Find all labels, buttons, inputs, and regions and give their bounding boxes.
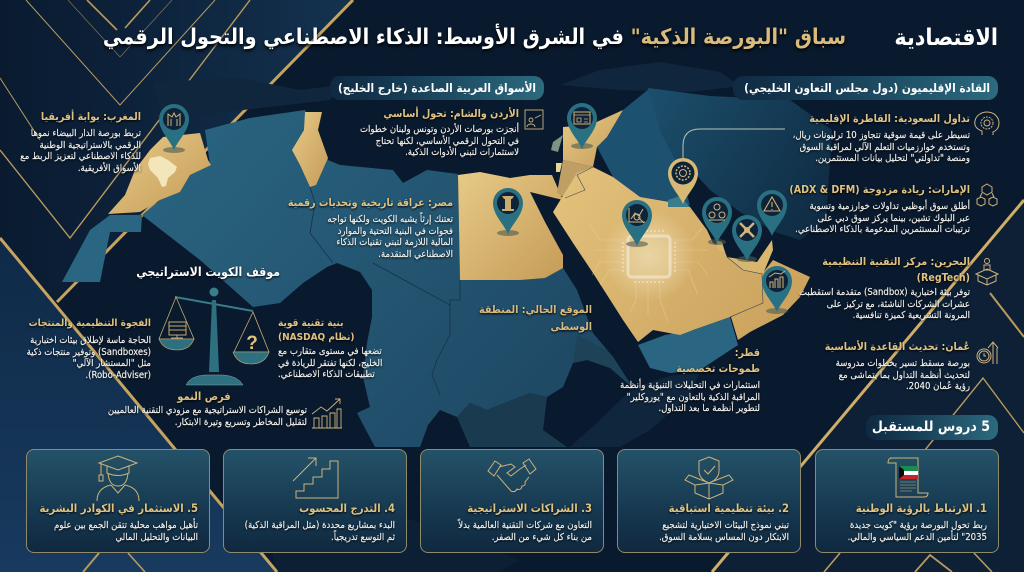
text: Oman: رؤية عُمان 2040. (906, 381, 970, 392)
text: Egypt: مصر: عراقة تاريخية وتحديات رقمية (288, 197, 453, 209)
icon: graduate (96, 456, 140, 501)
text: Morocco: تربط بورصة الدار البيضاء نموها (31, 128, 141, 139)
text: Bahrain: عشرات الشركات الناشئة، مع تركيز على (827, 299, 970, 310)
chip and circuits (603, 210, 695, 302)
text: Saudi: تداول السعودية: القاطرة الإقليمية (809, 113, 970, 125)
card 4: calculated progression: البدء بمشاريع محددة (مثل المراقبة الذكية) (245, 520, 395, 531)
text: strong tech infrastructure: الخليج، لكنها تفتقر للريادة في (278, 358, 382, 369)
text: growth opportunities (108, 390, 307, 429)
text: Saudi (793, 113, 970, 166)
pin: Saudi regional leader (668, 158, 698, 204)
text: Jordan and Levant: لاستثمارات لتبني الأدوات الذكية. (405, 147, 519, 158)
card 2: proactive regulatory: تبني نموذج البيئات الاختبارية لتشجيع (662, 520, 789, 531)
text: current position: الوسطى (551, 320, 592, 333)
card 3: strategic partnerships: التعاون مع شركات التقنية العالمية بدلاً (458, 520, 592, 531)
text: Bahrain: المرونة التشريعية كميزة تنافسية. (853, 310, 970, 321)
icon: stairs (292, 458, 338, 498)
card 3: strategic partnerships: من بناء كل شيء من الصفر. (492, 532, 592, 543)
card 1: national vision: ربط تحول البورصة برؤية "كويت جديدة (850, 520, 987, 531)
africa silhouette (148, 156, 177, 187)
icon: clock arrow (976, 341, 998, 364)
text: strong tech infrastructure: تطبيقات الذكاء الاصطناعي. (278, 369, 375, 380)
card 2: proactive regulatory (617, 449, 801, 553)
pin: Qatar (732, 215, 762, 261)
map land: dark north (153, 62, 740, 115)
card 2: proactive regulatory: الابتكار دون المساس بسلامة السوق. (659, 532, 789, 543)
text: Bahrain (798, 256, 971, 323)
text: Qatar: المراقبة الذكية بالتعاون مع "يوروكلير" (627, 392, 760, 403)
heading: five lessons: 5 دروس للمستقبل (872, 419, 990, 435)
icon: presenter board (524, 110, 544, 130)
card 5: human capital (26, 449, 210, 553)
text: Saudi: تسيطر على قيمة سوقية تتجاوز 10 ترليونات ريال، (793, 130, 970, 141)
text: Oman: لتحديث أنظمة التداول بما يتماشى مع (839, 370, 970, 381)
icon: brain gear (974, 112, 1000, 135)
text: growth opportunities: لتقليل المخاطر وتسريع وتيرة الابتكار. (175, 417, 307, 428)
text: Qatar: قطر: (735, 347, 760, 359)
heading: emerging Arab markets (330, 76, 544, 100)
text: Egypt: الاصطناعي المتقدمة. (378, 249, 453, 260)
text: Egypt (287, 197, 454, 261)
card 4: calculated progression: ثم التوسع تدريجياً. (331, 532, 395, 543)
card 1: national vision: 1. الارتباط بالرؤية الوطنية (856, 502, 987, 515)
map gold (108, 133, 211, 214)
text: Bahrain: البحرين: مركز التقنية التنظيمية (822, 256, 970, 268)
heading: regional leaders (733, 76, 998, 100)
text: Egypt: المالية اللازمة لتبني تقنيات الذكاء (336, 237, 453, 248)
heading: five lessons (866, 415, 998, 440)
icon: box sandbox (975, 258, 999, 286)
pin: Jordan and Levant (567, 103, 597, 149)
North Africa land (142, 110, 633, 447)
pin: Saudi data analysis (622, 200, 652, 246)
pin: Bahrain (702, 197, 732, 243)
text: Oman: عُمان: تحديث القاعدة الأساسية (825, 341, 970, 353)
pin: Oman (762, 266, 792, 312)
text: Oman: بورصة مسقط تسير بخطوات مدروسة (836, 358, 970, 369)
pin: Morocco (159, 104, 189, 150)
text: UAE (789, 184, 970, 236)
text: Qatar: لتطوير أنظمة ما بعد التداول. (658, 403, 760, 414)
pin: Egypt (493, 188, 523, 234)
icon: handshake (487, 458, 537, 492)
heading: emerging Arab markets: الأسواق العربية الصاعدة (خارج الخليج) (338, 81, 536, 95)
text: Jordan and Levant: أنجزت بورصات الأردن وتونس ولبنان خطوات (360, 124, 519, 135)
text: Morocco: للذكاء الاصطناعي لتعزيز الربط مع (20, 151, 141, 162)
connector (683, 129, 785, 158)
text: UAE: ترتيبات المستثمرين المدعومة بالذكاء الاصطناعي. (795, 224, 970, 235)
text: Bahrain: توفر بيئة اختبارية (Sandbox) متقدمة استقطبت (799, 287, 970, 298)
text: Morocco: المغرب: بوابة أفريقيا (41, 111, 141, 123)
text: growth opportunities: فرص النمو (177, 390, 231, 403)
card 4: calculated progression: 4. التدرج المحسوب (299, 502, 395, 515)
text: Jordan and Levant: الأردن والشام: تحول أساسي (383, 108, 519, 120)
text: Egypt: تعتنك إرثاً يشبه الكويت ولكنها تواجه (327, 214, 453, 225)
card 5: human capital: 5. الاستثمار في الكوادر البشرية (39, 502, 198, 515)
shadow ellipses (163, 143, 788, 314)
card 5: human capital: تأهيل مواهب محلية تتقن الجمع بين علوم (54, 520, 198, 531)
title: سباق "البورصة الذكية" في الشرق الأوسط: الذكاء الاصطناعي والتحول الرقمي (103, 25, 846, 50)
icon: cubes network (976, 183, 998, 206)
text: regulatory gap: الحاجة ماسة لإطلاق بيئات اختبارية (30, 335, 151, 346)
text: Jordan and Levant (360, 106, 520, 159)
text: Saudi: ومنصة "تداولتي" لتحليل بيانات المستثمرين. (815, 153, 970, 164)
text: Oman (824, 340, 970, 393)
card 3: strategic partnerships (420, 449, 604, 553)
text: UAE: أطلق سوق أبوظبي تداولات خوارزمية وتسوية (810, 201, 970, 212)
card 1: national vision (815, 449, 999, 553)
card 4: calculated progression (223, 449, 407, 553)
text: regulatory gap: (Robo-Adviser). (85, 370, 151, 381)
text: Egypt: فجوات في البنية التحتية والموارد (338, 226, 453, 237)
icon: growth chart (312, 398, 342, 428)
text: strong tech infrastructure: (نظام NASDAQ) (278, 332, 355, 343)
text: regulatory gap: الفجوة التنظيمية والمنتجات (29, 318, 151, 329)
text: growth opportunities: توسيع الشراكات الاستراتيجية مع مزودي التقنية العالميين (108, 405, 307, 416)
text: strong tech infrastructure (278, 318, 383, 380)
text: Saudi: وتستخدم خوارزميات التعلم الآلي لمراقبة السوق (800, 142, 970, 153)
pin: UAE (757, 190, 787, 236)
text: Qatar: طموحات تخصصية (676, 362, 760, 374)
text: current position (478, 303, 592, 335)
text: current position: الموقع الحالي: المنطقة (479, 303, 592, 316)
text: UAE: الإمارات: ريادة مزدوجة (ADX & DFM) (789, 184, 970, 196)
publisher name: الاقتصادية (894, 25, 998, 51)
Iraq and Iran (597, 88, 690, 205)
text: regulatory gap: (Sandboxes) وتوفير منتجات ذكية (27, 347, 151, 358)
text: Bahrain: (RegTech) (917, 272, 970, 284)
text: Qatar (620, 347, 760, 415)
card 3: strategic partnerships: 3. الشراكات الاستراتيجية (467, 502, 592, 515)
heading: regional leaders: القادة الإقليميون (دول مجلس التعاون الخليجي) (744, 81, 990, 95)
text: regulatory gap: مثل "المستشار الآلي" (73, 358, 151, 369)
card 1: national vision: 2035" لتأمين الدعم السياسي والمالي. (848, 532, 987, 543)
text: Morocco: الرقمي بالاستراتيجية الوطنية (39, 140, 141, 151)
icon: shield box (684, 456, 734, 500)
text: regulatory gap (26, 318, 151, 381)
card 5: human capital: البيانات والتحليل المالي (115, 532, 198, 543)
text: Morocco (20, 110, 142, 176)
card 2: proactive regulatory: 2. بيئة تنظيمية استباقية (669, 502, 789, 515)
icon: scroll with Kuwait flag (888, 458, 928, 498)
text: Morocco: الأسواق الأفريقية. (78, 163, 141, 174)
heading: Kuwait strategic position: موقف الكويت الاستراتيجي (136, 265, 280, 279)
text: Qatar: استثمارات في التحليلات التنبؤية وأنظمة (620, 380, 760, 391)
scales: ? (246, 333, 258, 354)
text: UAE: عبر البلوك تشين، بينما يركز سوق دبي على (817, 213, 970, 224)
text: strong tech infrastructure: بنية تقنية قوية (278, 318, 343, 329)
text: Jordan and Levant: في التحول الرقمي الأساسي، لكنها تحتاج (376, 136, 519, 147)
scales (158, 288, 270, 386)
text: strong tech infrastructure: تضعها في مستوى متقارب مع (278, 346, 382, 357)
